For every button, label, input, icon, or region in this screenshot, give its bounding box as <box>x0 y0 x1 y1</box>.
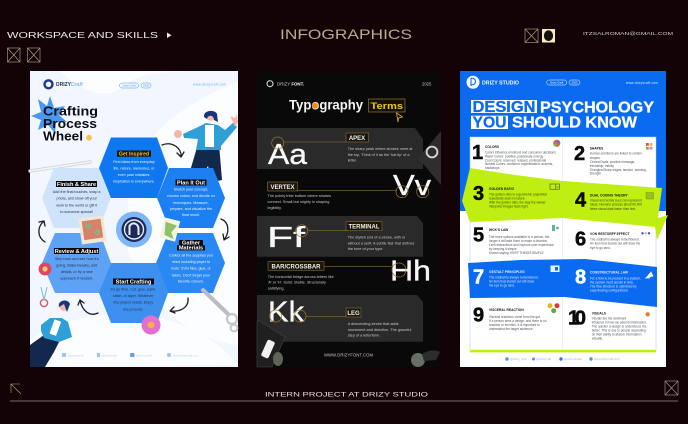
band: terminal: without a serif. A subtle flair that defines <box>348 241 414 245</box>
logo: drizy studio <box>466 76 520 89</box>
term: vertex: The pointy tribe bottom where strokes <box>268 194 331 198</box>
header pills and url: www.drizycraft.com <box>626 81 658 85</box>
hexagon: start crafting: It's go time. Cut, glue, paint, <box>111 288 156 292</box>
item 4 dual coding theory: ideas. Humans process about 60,000 <box>590 203 642 207</box>
item 6 von restorff effect: An item that stands out will draw the <box>590 242 641 246</box>
item 8 constructural law: 8 <box>575 266 586 288</box>
item 2 shapes: Human emotions are linked to certain <box>590 152 642 156</box>
year: 2025 <box>422 81 432 86</box>
arrow: finish to review side <box>39 221 45 242</box>
header pills and url: Drizy Craft <box>550 81 564 85</box>
item 5 hick's law: longer it will take them to make a decision. <box>489 239 548 243</box>
hexagon: finish and share: to someone special! <box>60 210 93 214</box>
icon: pink flower <box>142 316 160 334</box>
item 8 constructural law: The flow structure is optimized by <box>590 284 637 288</box>
item 4 dual coding theory: times visual data faster than text. <box>590 207 636 211</box>
item 3 golden ratio: GOLDEN RATIO <box>489 187 514 191</box>
band: leg: LEG <box>347 311 360 317</box>
term: bar crossbar: The horizontal bridge across letters like <box>268 275 334 279</box>
item 7 gestalt principles: 7 <box>473 266 484 288</box>
item 2 shapes: Circles/Ovals: positive message, <box>590 160 635 164</box>
item 6 von restorff effect: eye to go land. <box>590 246 611 250</box>
item 1 colors: Cool Colors: reserved, relaxed, professional <box>485 158 546 162</box>
item 1 colors <box>472 140 560 170</box>
panel: design psychology <box>460 71 668 367</box>
hexagon: finish and share: photo, and show off your <box>57 197 98 201</box>
hexagon: finish and share: Add the final touches, snap a <box>53 190 101 194</box>
hexagon: plan it out: Plan It Out <box>177 180 205 186</box>
item 9 visceral reaction <box>473 303 560 331</box>
heading: crafting process wheel <box>43 104 98 144</box>
hexagon: get inspired: Get Inspired <box>119 152 149 158</box>
hexagon: plan it out: final result. <box>182 213 200 217</box>
band: apex: APEX <box>349 136 365 142</box>
band: apex: the top. Think of it as the 'hat tip' of a <box>348 153 410 157</box>
hexagon: gather materials: need including paper to <box>172 260 210 264</box>
band: terminal: Ff <box>267 222 306 254</box>
icon: blue star <box>31 96 67 133</box>
hexagon: review and adjust: Review & Adjust <box>55 249 98 255</box>
heading: design psychology you should know: SHOULD KNOW <box>512 115 637 132</box>
hexagon: finish and share: work to the world or gift it <box>56 203 97 207</box>
footer: social links <box>62 353 199 357</box>
term: vertex: connect. Small but mighty in shaping <box>268 200 329 204</box>
icon: cursor arrow <box>396 113 402 122</box>
heading: crafting process wheel: Crafting <box>43 104 98 119</box>
item 10 visuals: on their ability to absorb information <box>592 332 642 336</box>
hexagon: plan it out <box>157 168 225 228</box>
item 4 dual coding theory: DUAL CODING THEORY <box>590 193 629 197</box>
illustration: woman waving <box>174 111 238 182</box>
icon: yellow dot <box>86 135 92 141</box>
hexagon: start crafting: the project needs. Enjoy <box>114 301 153 305</box>
header pills and url: www.drizycraft.com <box>193 83 226 87</box>
arrow: bottom left corner <box>11 384 21 394</box>
hexagon: start crafting: stitch, or layer. Whatever <box>113 294 154 298</box>
hexagon: get inspired: life, nature, memories, or <box>114 166 155 170</box>
item 10 visuals: influence in how we absorb information. <box>592 320 647 324</box>
footer: social links: @drizycraft <box>536 357 551 361</box>
footer: social links: @drizy.craft <box>136 353 152 357</box>
hexagon: get inspired: inspiration is everywhere. <box>113 179 155 183</box>
item 5 hick's law: Limit distractions and improve user experience <box>489 243 554 247</box>
hexagon: review and adjust: Step back and see how it's <box>55 257 99 261</box>
heading: design psychology you should know: PSYCHOLOGY <box>540 99 655 116</box>
term: vertex: Vv <box>393 170 432 202</box>
footer: social links: @drizy.craft <box>68 353 84 357</box>
item 5 hick's law: The more options available to a person, the <box>489 235 550 239</box>
band: terminal: the tone of your type. <box>348 247 383 251</box>
term: vertex <box>268 170 432 210</box>
item 6 von restorff effect: 6 <box>575 229 586 251</box>
heading: design psychology you should know: YOU <box>472 115 506 132</box>
item 5 hick's law: HICK'S LAW <box>489 228 509 232</box>
hexagon: finish and share <box>42 168 111 228</box>
header: workspace and skills <box>7 30 172 40</box>
item 2 shapes <box>574 143 652 176</box>
item 3 golden ratio: The golden ratio is a geometric proportion <box>489 193 547 197</box>
header pills and url <box>547 80 658 85</box>
item 2 shapes: SHAPES <box>590 146 604 150</box>
hexagon: gather materials: tools: SVG files, glue, or <box>171 266 212 270</box>
band: leg: movement and direction. The graceful <box>348 328 412 332</box>
band: leg: Kk <box>268 297 305 329</box>
arrow: start to review <box>78 300 98 314</box>
band: apex <box>257 128 423 171</box>
panel: crafting process wheel <box>30 71 238 367</box>
hexagon: gather materials: fabric. Don't forget your <box>172 273 211 277</box>
item 10 visuals: visually. <box>592 336 603 340</box>
item 7 gestalt principles: GESTALT PRINCIPLES <box>489 270 525 274</box>
heading box: terms: Terms <box>370 100 403 111</box>
item 3 golden ratio: interprets images feels right. <box>489 204 529 208</box>
item 7 gestalt principles: An item that stands out will draw <box>489 279 535 283</box>
header: workspace and skills: WORKSPACE AND SKILLS <box>7 30 159 40</box>
item 5 hick's law: 5 <box>473 225 484 247</box>
item 7 gestalt principles: The oddball is always remembered. <box>489 275 539 279</box>
icon: placeholder box and badge right <box>525 29 555 42</box>
item 7 gestalt principles: the eye to go land. <box>489 283 515 287</box>
item 10 visuals: better. This is due to people depending <box>592 328 646 332</box>
panel: typography terms <box>257 71 441 367</box>
item 5 hick's law: by keeping it simple. <box>489 247 518 251</box>
item 9 visceral reaction: VISCERAL REACTION <box>489 308 524 312</box>
item 9 visceral reaction: If a person sees a design, and there is no <box>489 319 547 323</box>
hexagon: gather materials: Materials <box>179 246 203 252</box>
blue band <box>468 259 657 307</box>
item 10 visuals: The quicker a design is understood, the <box>592 324 647 328</box>
item 3 golden ratio: 3 <box>473 183 484 205</box>
item 2 shapes: 2 <box>574 143 585 165</box>
item 10 visuals: VISUALS <box>592 312 607 316</box>
title: infographics: INFOGRAPHICS <box>280 27 412 42</box>
item 6 von restorff effect <box>575 229 650 251</box>
term: bar crossbar: satisfying. <box>268 287 285 291</box>
arrow: inspired to plan <box>162 144 184 157</box>
item 8 constructural law: easy-flowing configurations. <box>590 288 629 292</box>
hexagon: review and adjust: going. Make tweaks, add <box>56 263 97 267</box>
band: terminal: TERMINAL <box>348 224 380 230</box>
item 1 colors: 1 <box>472 142 483 164</box>
band: leg <box>257 295 423 342</box>
illustration: thermometer tool <box>30 162 111 198</box>
item 4 dual coding theory: Visual and verbal cues can represent <box>590 198 642 202</box>
item 2 shapes: strength <box>590 172 601 176</box>
term: bar crossbar <box>268 256 431 291</box>
arrow: plan to gather side <box>221 219 229 240</box>
band: terminal: The stylish end of a stroke, with or <box>348 236 406 240</box>
heading: typography: Typography <box>289 98 364 113</box>
icon: placeholder boxes left <box>8 48 40 62</box>
item 4 dual coding theory: 4 <box>575 189 587 211</box>
hexagon: plan it out: techniques. Measure, <box>173 201 209 205</box>
item 5 hick's law <box>473 225 559 255</box>
contact email: ITZSALROMAN@GMAIL.COM <box>583 31 673 36</box>
illustration: scissors <box>203 290 237 331</box>
center badge <box>116 212 152 248</box>
illustration: woman with scissors <box>30 287 72 367</box>
term: bar crossbar: BAR/CROSSBAR <box>271 264 321 270</box>
item 2 shapes: shapes. <box>590 156 601 160</box>
hexagon: start crafting: Start Crafting <box>116 279 152 285</box>
term: vertex: legibility. <box>268 206 282 210</box>
hexagon: review and adjust <box>42 233 111 293</box>
icon: glossy logo triangle <box>418 131 441 185</box>
item 7 gestalt principles <box>473 266 560 288</box>
item 1 colors: Warm Colors: positive, passionate energy <box>485 154 543 158</box>
heading box: terms <box>368 99 405 112</box>
hexagon: start crafting: the process. <box>123 307 143 311</box>
header pills and url <box>120 83 226 88</box>
footer: social links: @drizy.studio <box>564 357 582 361</box>
footer rule <box>10 400 678 402</box>
image: statue right <box>411 350 440 367</box>
item 8 constructural law <box>575 266 653 292</box>
footer: social links: @drizycraft <box>102 353 117 357</box>
icon: red flower <box>39 263 51 275</box>
footer: social links: @drizy_craft <box>510 357 527 361</box>
item 2 shapes: friendship, infinity <box>590 164 614 168</box>
hexagon: review and adjust: details, or try a new <box>61 270 93 274</box>
item 3 golden ratio <box>473 183 560 208</box>
item 8 constructural law: For a flow to be present in a system, <box>590 276 641 280</box>
item 3 golden ratio: repeatedly seen in nature. <box>489 197 525 201</box>
logo: drizy craft: DRIZY <box>56 82 72 88</box>
item 1 colors: backdrops <box>485 166 500 170</box>
heading: crafting process wheel: Process <box>43 116 97 131</box>
band: apex: Aa <box>268 139 308 171</box>
footer: social links: www.drizycraft.com <box>173 353 199 357</box>
image: framed floral photo <box>78 215 107 245</box>
hexagon: get inspired: Find ideas from everyday <box>113 160 155 164</box>
image: statue left <box>273 352 283 366</box>
item 9 visceral reaction: reaction or emotion, it is important to <box>489 323 540 327</box>
heading: design psychology you should know: DESIGN <box>472 99 536 116</box>
item 9 visceral reaction: Visceral reactions come from the gut. <box>489 315 541 319</box>
band: apex: letter. <box>348 159 357 163</box>
image: leaf card <box>160 217 180 242</box>
hexagon: get inspired: even past mistakes: <box>118 173 150 177</box>
lime band <box>462 168 668 240</box>
heading: design psychology you should know <box>471 99 655 132</box>
hexagon: plan it out: prepare, and visualize the <box>170 207 212 211</box>
item 10 visuals: Visuals are the dominant <box>592 316 626 320</box>
item 10 visuals: 10 <box>568 307 586 329</box>
bottom lime strip <box>470 350 656 352</box>
hexagon: plan it out: Sketch your concept, <box>174 188 208 192</box>
item 8 constructural law: CONSTRUCTURAL LAW <box>590 270 629 274</box>
item 5 hick's law: Known saying: KEEP THINGS SIMPLE <box>489 251 544 255</box>
arrow: gather to start <box>170 298 188 313</box>
icon: placeholder box bottom right <box>665 381 678 395</box>
card background <box>470 137 656 350</box>
url: WWW.DRIZYFONT.COM <box>324 353 374 358</box>
band: terminal <box>257 216 423 257</box>
footer: intern project: INTERN PROJECT AT DRIZY STUDIO <box>265 391 428 398</box>
item 4 dual coding theory <box>575 189 654 211</box>
heading: crafting process wheel: Wheel <box>43 129 83 144</box>
logo: drizy font <box>267 81 304 87</box>
item 1 colors: COLORS <box>485 145 500 149</box>
footer: social links <box>505 357 620 361</box>
hexagon: start crafting <box>99 263 168 323</box>
hexagon: review and adjust: approach if needed. <box>60 276 93 280</box>
band: leg: step of a letterform. <box>348 334 380 338</box>
item 1 colors: Neutral Colors: confident, sophisticated, accents, <box>485 162 553 166</box>
hexagon: finish and share: Finish & Share <box>57 182 96 188</box>
header pills and url: Drizy Craft <box>122 84 136 88</box>
hexagon: plan it out: choose colors, and decide on <box>167 194 215 198</box>
term: bar crossbar: Hh <box>390 256 431 288</box>
band: leg: A descending stroke that adds <box>348 322 399 326</box>
item 6 von restorff effect: The oddball is always remembered. <box>590 238 640 242</box>
hexagon: get inspired <box>99 138 168 198</box>
item 1 colors: Colors influence emotions and consumer decisions. <box>485 150 557 154</box>
logo: drizy craft <box>43 79 83 90</box>
logo: drizy font: DRIZY FONT. <box>277 82 304 86</box>
hexagon: gather materials: favorite colours. <box>178 280 204 284</box>
item 2 shapes: Triangles/Sharp edges: tension, warning, <box>590 168 647 172</box>
item 6 von restorff effect: VON RESTORFF EFFECT <box>590 232 630 236</box>
logo: drizy craft: Craft <box>70 82 83 88</box>
footer: social links: www.drizycraft.com <box>594 357 620 361</box>
item 9 visceral reaction: 9 <box>473 305 484 327</box>
icon: orange dot <box>312 103 318 109</box>
hexagon: gather materials <box>156 233 225 293</box>
term: vertex: VERTEX <box>270 185 295 191</box>
hexagon: gather materials: Collect all the supplies you <box>169 253 213 257</box>
logo: drizy studio: DRIZY STUDIO <box>482 80 520 86</box>
item 9 visceral reaction: understand the target audience. <box>489 327 533 331</box>
item 10 visuals <box>568 307 650 340</box>
term: bar crossbar: 'A' or 'H'. Solid. Stable. Structurally <box>268 281 326 285</box>
item 8 constructural law: the system must persist in time. <box>590 280 634 284</box>
hexagon: gather materials: Gather <box>182 240 201 246</box>
band: apex: The sharp peak where strokes meet at <box>348 147 413 151</box>
item 3 golden ratio: With the golden ratio, the way the viewer <box>489 200 546 204</box>
image: phone <box>257 320 285 367</box>
header pills and url: 2025 <box>143 84 150 88</box>
header pills and url: 2025 <box>571 81 578 85</box>
